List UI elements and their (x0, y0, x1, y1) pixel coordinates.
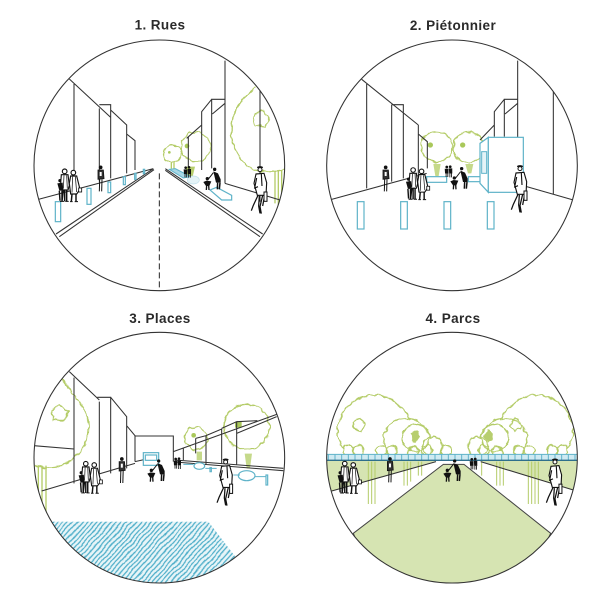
title: 4. Parcs: 4. Parcs (426, 311, 480, 326)
people: family (406, 168, 430, 200)
circle outline (327, 332, 577, 583)
circle outline (327, 40, 577, 291)
side lawns (323, 461, 581, 491)
water basin (52, 522, 236, 582)
trees: two round trees (421, 131, 484, 163)
tree trunks and dots (428, 142, 473, 176)
blue furniture and pools (143, 453, 268, 485)
person: walking man (511, 165, 527, 213)
title: 2. Piétonnier: 2. Piétonnier (410, 18, 496, 33)
person: standing (387, 457, 393, 482)
central lawn (353, 464, 551, 592)
people: distant pair (184, 166, 191, 178)
trees: green vegetation (164, 87, 287, 171)
trees: green vegetation (35, 378, 269, 468)
person: standing (119, 457, 125, 483)
person: walking man (546, 458, 562, 506)
person: standing (98, 165, 104, 191)
tree trunks (368, 462, 538, 504)
panel: piétonnier (327, 40, 577, 291)
people: adult and child (443, 459, 461, 482)
blue kiosk and benches (427, 137, 523, 192)
person: walking man (251, 166, 267, 214)
buildings and road lines (38, 61, 280, 237)
panel: parcs (323, 332, 583, 592)
trunks and green details (38, 422, 252, 522)
fence along the canal (323, 454, 583, 460)
buildings and ground lines (332, 61, 573, 200)
road centre dashed line (158, 173, 160, 290)
people: family (338, 461, 361, 493)
people: family (57, 169, 82, 202)
people: adult and child (203, 168, 221, 190)
panel: rues (34, 40, 287, 291)
title: 1. Rues: 1. Rues (135, 18, 185, 32)
people: distant pair (470, 458, 477, 470)
trees: right group (468, 395, 573, 457)
bollards row (357, 202, 494, 229)
people: family (79, 461, 102, 493)
people: distant pair (445, 165, 452, 177)
tree trunks and green details (168, 144, 282, 207)
title: 3. Places: 3. Places (129, 311, 191, 326)
people: adult and child (147, 459, 165, 482)
person: walking man (217, 458, 233, 506)
panel: places (34, 332, 285, 598)
circle outline (34, 40, 285, 291)
street furniture: bollards and benches (55, 169, 232, 222)
trees: left group (337, 395, 451, 457)
buildings and ground lines (34, 372, 283, 491)
person: standing (383, 165, 389, 191)
people: distant pair (174, 457, 181, 469)
lawn edge lines (332, 462, 573, 491)
people: adult and child (450, 167, 468, 189)
circle outline (34, 332, 285, 583)
